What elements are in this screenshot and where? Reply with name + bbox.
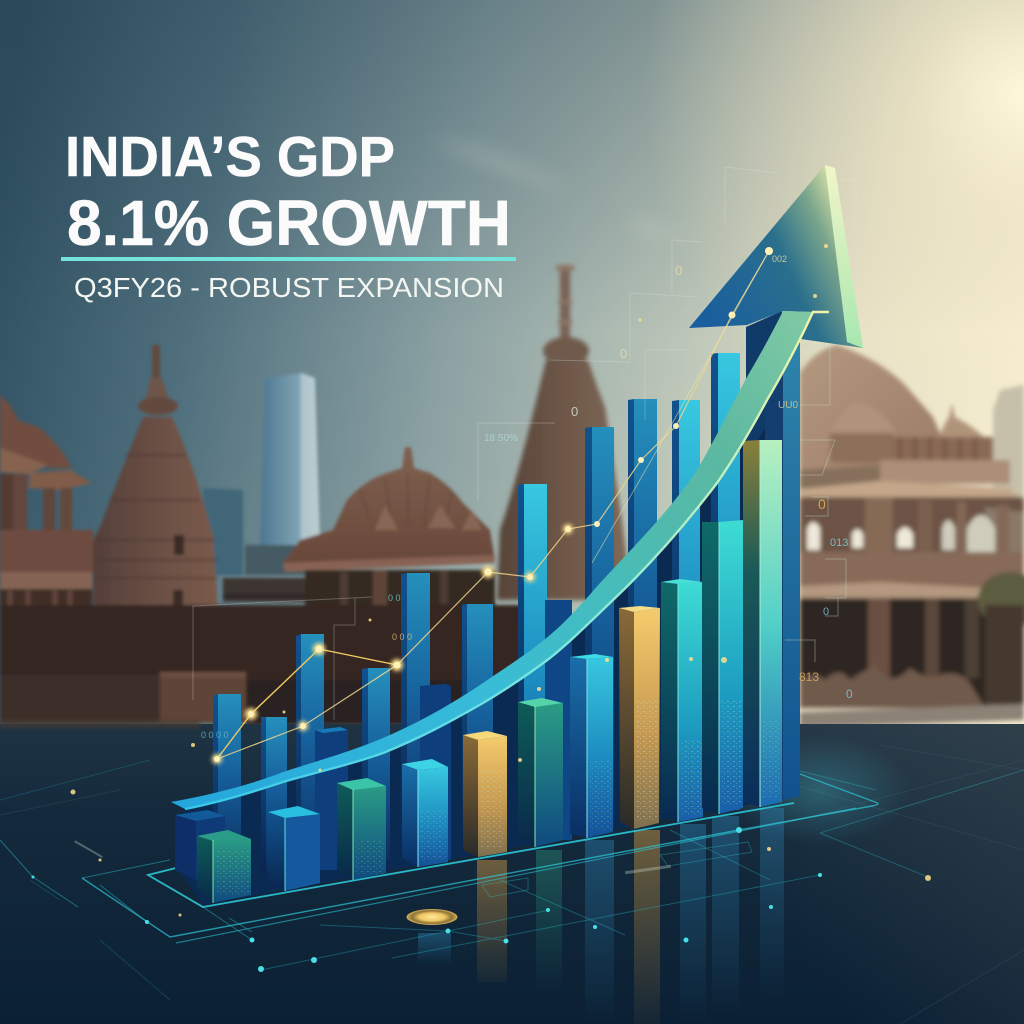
floor reflections <box>418 808 784 1024</box>
floating data digits: 0 <box>571 404 578 419</box>
back row bars <box>213 311 800 870</box>
floating data digits: 0 0 0 <box>392 632 412 642</box>
growth arrow <box>171 165 863 809</box>
blurred left skyline <box>0 345 530 725</box>
background sky <box>0 0 1024 740</box>
floating data digits: 0 0 0 0 <box>201 730 229 740</box>
bar micro-data texture <box>216 700 780 895</box>
bar 10 <box>545 600 572 840</box>
bar 15 <box>746 311 800 800</box>
right palace <box>800 345 1024 708</box>
sunlight glow <box>0 0 1024 740</box>
floating data digits: 0 <box>675 263 682 278</box>
left pavilion <box>0 395 93 617</box>
front bar I gold <box>619 606 660 829</box>
central shikhara temple <box>497 264 632 600</box>
gold coin marker <box>406 909 458 925</box>
front bar J <box>661 579 703 822</box>
subtitle: Q3FY26 - ROBUST EXPANSION <box>74 272 504 303</box>
distant pale ground band <box>800 704 1024 728</box>
floating data digits: 0 <box>846 687 853 701</box>
particles <box>70 244 931 916</box>
headline: India's GDP: INDIA’S GDP <box>65 125 395 189</box>
bar 8 <box>462 604 493 850</box>
floating data digits: 002 <box>772 254 787 264</box>
distant glass towers <box>203 373 335 575</box>
far right tower <box>993 385 1024 497</box>
floating data digits: 18 50% <box>484 433 518 444</box>
ground plane <box>0 720 1024 1024</box>
bar 6 <box>401 573 430 860</box>
left shikhara temple <box>93 345 220 630</box>
front bar E <box>402 759 448 867</box>
front bar B <box>197 830 251 903</box>
ground floor joints <box>0 745 1024 1024</box>
front bar A <box>175 810 225 880</box>
bar 13 <box>672 400 700 815</box>
front row bars <box>175 440 782 903</box>
bar 14 <box>711 353 740 810</box>
arrow bright edge <box>185 312 829 809</box>
bar 12 <box>628 399 657 820</box>
floating data digits: 0 0 <box>388 593 401 603</box>
central dome pavilion <box>223 447 495 606</box>
floating data digits: 813 <box>799 670 819 684</box>
blurred central and right skyline <box>497 264 1024 728</box>
holographic circuit floor <box>0 760 1024 1000</box>
headline: 8.1% growth: 8.1% GROWTH <box>67 187 511 259</box>
floating data digits: 0 <box>620 346 627 361</box>
floating data digits: UU0 <box>778 400 798 411</box>
bar 5 <box>362 668 390 860</box>
arrow head side face <box>825 165 863 348</box>
front bar L mint <box>743 440 782 807</box>
front bar F gold <box>463 731 507 857</box>
yellow trend line with nodes <box>212 247 773 764</box>
front bar C <box>268 806 320 891</box>
underline <box>61 257 516 261</box>
bar 1 <box>213 694 241 870</box>
front bar D <box>337 778 386 880</box>
small floor data marks <box>74 840 671 874</box>
arrow ribbon shaft <box>171 311 813 809</box>
navy backing under the ribbon <box>176 400 800 905</box>
floating data frames <box>193 167 856 720</box>
title block <box>61 125 516 303</box>
bar 3 <box>296 634 324 870</box>
bar 7 <box>420 684 451 860</box>
floating data digits: 0 <box>818 496 826 512</box>
bar 11 <box>585 427 614 830</box>
bar 9 <box>518 484 547 840</box>
floating data digits <box>201 254 853 740</box>
front bar G green <box>518 698 563 847</box>
temple base wall <box>0 605 530 725</box>
bar 4 <box>315 727 348 870</box>
front bar H <box>570 654 613 838</box>
floating data digits: 0 <box>823 606 829 618</box>
front bar K <box>702 520 743 814</box>
floating data digits: 013 <box>830 537 848 549</box>
bar 2 <box>261 717 287 870</box>
arrow head <box>689 165 863 348</box>
